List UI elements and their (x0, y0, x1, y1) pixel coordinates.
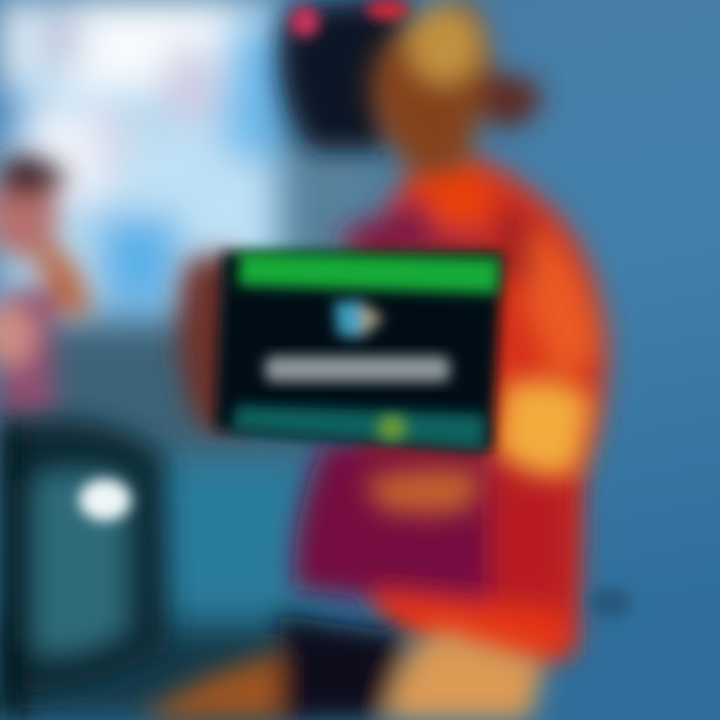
green top bar (238, 252, 500, 294)
yellow-green spot on bar (377, 415, 407, 441)
headset (281, 0, 410, 150)
red headset lights (290, 0, 410, 38)
orange forearm (365, 380, 592, 515)
logo icon (334, 300, 384, 338)
legs at bottom (140, 615, 545, 720)
dark chair at lower left (0, 419, 170, 720)
held card (215, 252, 503, 452)
mid grey-teal room backdrop (0, 130, 380, 720)
white highlight on chair (79, 479, 131, 521)
blurred card title (265, 356, 450, 382)
bright monitor at upper left (0, 0, 280, 315)
red-orange shirt (335, 145, 608, 660)
face and hair (370, 0, 542, 175)
shadow at lower right (588, 587, 632, 619)
teal bottom bar (232, 405, 486, 450)
maroon lower shirt (294, 440, 575, 665)
hand holding card (178, 254, 240, 430)
person at left edge (0, 155, 90, 420)
card body (215, 252, 503, 452)
